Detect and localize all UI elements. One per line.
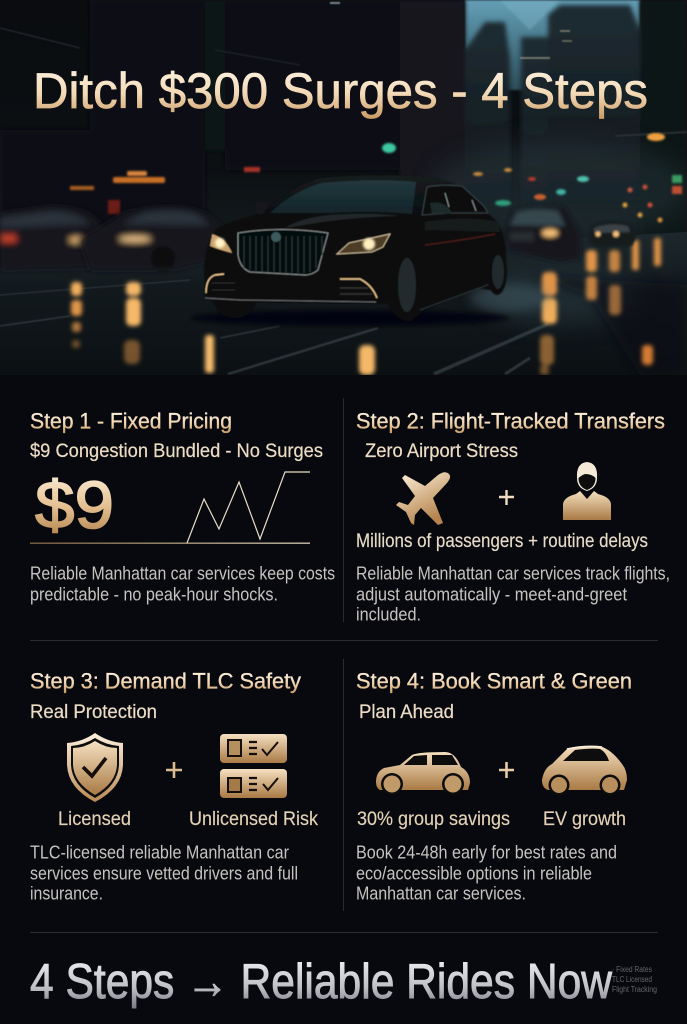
icon: plus (499, 490, 514, 505)
footer mini checklist (612, 965, 657, 994)
distant haze (430, 140, 687, 240)
step 2 subheading: Zero Airport Stress (365, 441, 518, 462)
icon: sedan car (376, 752, 470, 795)
icon: electric car (542, 746, 627, 796)
big $9 figure: $9 (35, 468, 114, 543)
icon: plus (166, 762, 182, 778)
step 2 heading: Step 2: Flight-Tracked Transfers (356, 408, 665, 434)
footer mini checklist: · Fixed Rates (612, 965, 652, 974)
bottom card (220, 769, 287, 798)
footer mini checklist: Flight Tracking (612, 985, 657, 994)
panel: step 1 fixed pricing (30, 408, 335, 604)
title: Ditch $300 Surges - 4 Steps (33, 63, 648, 119)
rain spray behind car (470, 284, 550, 312)
step 4 heading: Step 4: Book Smart & Green (356, 668, 632, 694)
wet road (0, 232, 687, 336)
hood highlights (285, 214, 400, 228)
wheels (214, 249, 507, 319)
grille (238, 230, 328, 275)
icon: airplane (396, 472, 450, 525)
step 2 body text: included. (356, 604, 421, 624)
icon: licence cards (220, 734, 287, 798)
building details (0, 2, 687, 136)
windshield (270, 180, 416, 214)
icon: driver (563, 462, 611, 520)
step 1 body text: predictable - no peak-hour shocks. (30, 584, 278, 604)
lane markings (0, 280, 548, 374)
blurred car far left (0, 206, 108, 270)
step 4 body text: eco/accessible options in reliable (356, 864, 592, 884)
step 4 subheading: Plan Ahead (359, 702, 454, 723)
step 4 body text: Book 24-48h early for best rates and (356, 842, 617, 862)
city buildings (0, 0, 687, 240)
label: licensed: Licensed (58, 809, 131, 830)
sky glimpse between buildings (465, 0, 640, 90)
step 2 body text (356, 564, 670, 624)
top card (220, 734, 287, 763)
light reflections on the road (71, 238, 661, 375)
line chart: surge line (30, 472, 310, 544)
footer mini checklist: TLC Licensed (612, 975, 652, 984)
panel: step 4 book smart and green (356, 668, 632, 904)
footer headline: 4 Steps → Reliable Rides Now (30, 955, 613, 1009)
step 3 body text: services ensure vetted drivers and full (30, 864, 298, 884)
step 4 body text: Manhattan car services. (356, 884, 526, 904)
step 3 body text: insurance. (30, 884, 103, 904)
label: unlicensed risk: Unlicensed Risk (189, 809, 318, 830)
step 2 caption: Millions of passengers + routine delays (356, 531, 648, 552)
step 1 subheading: $9 Congestion Bundled - No Surges (30, 441, 323, 462)
step 1 body text (30, 564, 335, 604)
step 2 body text: adjust automatically - meet-and-greet (356, 584, 627, 604)
blurred car centre left (80, 208, 230, 270)
headlights (210, 234, 390, 254)
step 3 heading: Step 3: Demand TLC Safety (30, 668, 301, 694)
mirrors (430, 202, 452, 214)
icon: shield with check (67, 733, 123, 802)
panel: step 3 demand TLC safety (30, 668, 318, 904)
icon: plus (499, 762, 514, 778)
small distant car (589, 221, 636, 246)
street lights and signs (70, 133, 682, 222)
side windows (422, 185, 488, 215)
main black sedan (190, 175, 510, 326)
label: group savings: 30% group savings (357, 809, 510, 830)
hero photo: black sedan on a rainy city street (0, 0, 687, 375)
blurred car on the right (504, 207, 580, 262)
step 1 body text: Reliable Manhattan car services keep costs (30, 564, 335, 584)
step 3 body text: TLC-licensed reliable Manhattan car (30, 842, 289, 862)
step 3 body text (30, 842, 298, 904)
step 4 body text (356, 842, 617, 904)
label: EV growth: EV growth (543, 809, 626, 830)
step 3 subheading: Real Protection (30, 702, 157, 723)
step 1 heading: Step 1 - Fixed Pricing (30, 408, 232, 434)
lower daytime running lights (205, 274, 377, 302)
panel: step 2 flight-tracked transfers (356, 408, 670, 624)
